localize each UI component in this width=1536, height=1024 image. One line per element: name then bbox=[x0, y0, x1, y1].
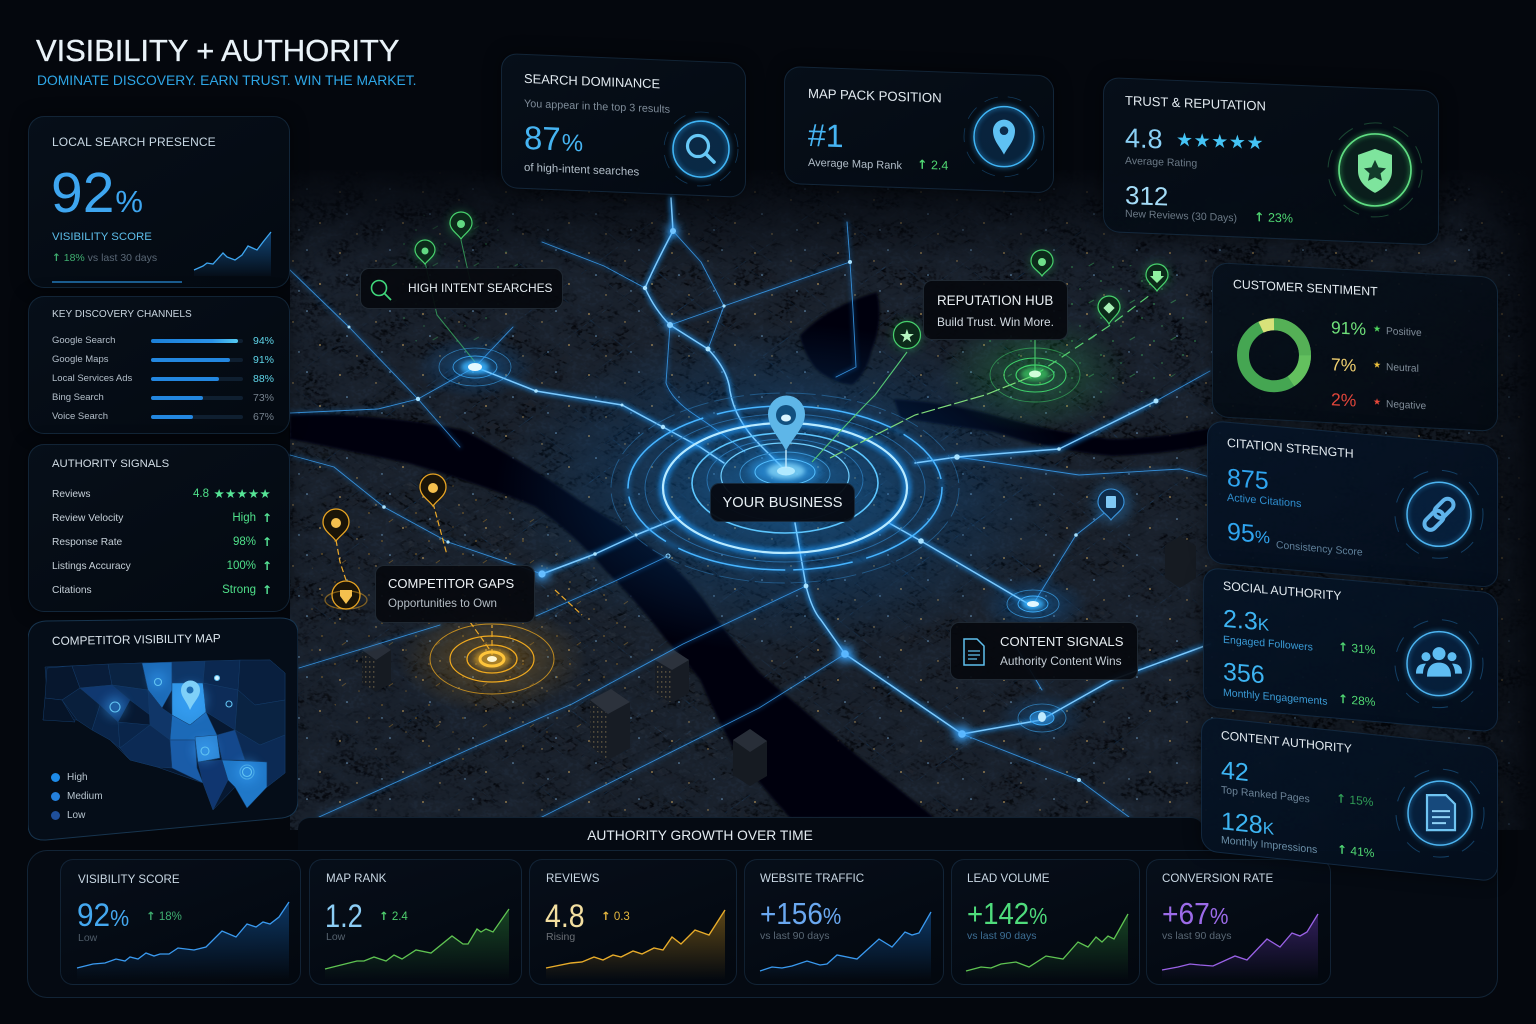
trend: ↑ 2.4 bbox=[379, 909, 408, 923]
metric label: Average Map Rank bbox=[808, 157, 902, 172]
row: response rate bbox=[52, 535, 272, 549]
metric: #1 bbox=[808, 117, 844, 154]
road network bbox=[290, 198, 1210, 820]
metric: followers: 2.3K bbox=[1223, 605, 1269, 636]
heading: KEY DISCOVERY CHANNELS bbox=[52, 309, 192, 320]
sub label: vs last 90 days bbox=[760, 930, 829, 942]
heading: SEARCH DOMINANCE bbox=[524, 71, 660, 91]
label: REVIEWS bbox=[546, 872, 599, 885]
heading: TRUST & REPUTATION bbox=[1125, 93, 1266, 114]
sparkline bbox=[324, 908, 510, 970]
metric: +142% bbox=[967, 896, 1047, 931]
metric: pages: 42 bbox=[1221, 756, 1249, 787]
metric: +156% bbox=[760, 896, 841, 931]
card: visibility score bbox=[60, 859, 301, 985]
row: reviews: Reviews bbox=[52, 489, 90, 500]
metric: +67% bbox=[1162, 896, 1228, 931]
trend: ↑ 18% vs last 30 days bbox=[52, 252, 157, 264]
row: review velocity: Review Velocity bbox=[52, 513, 123, 524]
row: google search: Google Search bbox=[52, 335, 115, 346]
row: response rate: Response Rate bbox=[52, 537, 122, 548]
row: listings accuracy: Listings Accuracy bbox=[52, 561, 131, 572]
metric: citations: 875 bbox=[1227, 464, 1269, 495]
panel: local search presence bbox=[28, 116, 290, 288]
sub label: Low bbox=[78, 932, 97, 944]
panel: customer sentiment: Positive bbox=[1386, 326, 1422, 339]
label: HIGH INTENT SEARCHES bbox=[408, 281, 552, 295]
row: reviews bbox=[52, 486, 271, 501]
panel: citation strength: Active Citations bbox=[1227, 492, 1301, 510]
row: listings accuracy: 100% bbox=[227, 560, 256, 572]
sub label: Rising bbox=[546, 931, 575, 943]
metric: impressions: 128K bbox=[1221, 807, 1274, 839]
heading: SOCIAL AUTHORITY bbox=[1223, 579, 1341, 603]
panel: content authority: ↑ 41% bbox=[1337, 842, 1374, 860]
positive: 91% bbox=[1331, 317, 1366, 339]
heading: LOCAL SEARCH PRESENCE bbox=[52, 135, 216, 149]
panel: customer sentiment: ★ bbox=[1373, 324, 1381, 335]
description: You appear in the top 3 results bbox=[524, 98, 670, 116]
row: voice search bbox=[52, 411, 274, 423]
heading: REPUTATION HUB bbox=[937, 293, 1053, 308]
callout: reputation hub bbox=[923, 280, 1068, 340]
title: VISIBILITY + AUTHORITY bbox=[36, 33, 399, 68]
panel: citation strength bbox=[1207, 420, 1498, 588]
row: local services ads: Local Services Ads bbox=[52, 373, 132, 384]
green target bbox=[990, 348, 1080, 402]
row: citations: Citations bbox=[52, 585, 92, 596]
row: bing search: 73% bbox=[253, 392, 274, 404]
metric: 4.8 bbox=[545, 898, 585, 934]
towers bbox=[362, 536, 1196, 786]
metric: engagements: 356 bbox=[1223, 658, 1265, 689]
row: voice search: 67% bbox=[253, 411, 274, 423]
heading: COMPETITOR VISIBILITY MAP bbox=[52, 631, 221, 648]
heading: AUTHORITY GROWTH OVER TIME bbox=[587, 828, 813, 843]
sub label: Low bbox=[326, 931, 345, 943]
panel: social authority: Monthly Engagements bbox=[1223, 687, 1327, 708]
sparkline bbox=[966, 914, 1128, 972]
rating label: Average Rating bbox=[1125, 155, 1197, 170]
city map background bbox=[288, 172, 1520, 830]
big metric: 92% bbox=[51, 161, 143, 225]
icon: shield bbox=[1328, 122, 1422, 218]
stars: ★★★★★ bbox=[1176, 129, 1264, 154]
legend: medium: Medium bbox=[67, 791, 103, 802]
panel: customer sentiment: ★ bbox=[1373, 397, 1381, 408]
metric: 92% bbox=[77, 897, 129, 933]
metric: 1.2 bbox=[325, 898, 363, 934]
panel: social authority: Engaged Followers bbox=[1223, 634, 1313, 654]
row: citations: ↑ bbox=[262, 583, 272, 597]
panel: authority signals bbox=[28, 444, 290, 612]
blue targets bbox=[439, 348, 1066, 732]
row: google maps: Google Maps bbox=[52, 354, 109, 365]
legend: low bbox=[51, 810, 86, 821]
callout: your business: YOUR BUSINESS bbox=[722, 495, 843, 511]
panel: content authority: ↑ 15% bbox=[1336, 791, 1373, 809]
top band bbox=[298, 817, 1203, 858]
card: reviews bbox=[529, 859, 737, 985]
sparkline bbox=[76, 902, 290, 972]
row: citations: Strong bbox=[222, 584, 256, 596]
heading: COMPETITOR GAPS bbox=[388, 576, 514, 591]
reputation lines bbox=[336, 240, 1150, 655]
row: review velocity: High bbox=[232, 512, 256, 524]
panel: content authority: Top Ranked Pages bbox=[1221, 784, 1310, 805]
sparkline bbox=[760, 912, 932, 973]
panel: content authority: Monthly Impressions bbox=[1221, 834, 1317, 856]
reviews: 312 bbox=[1125, 180, 1168, 212]
trend: ↑ 18% bbox=[146, 909, 182, 923]
panel: social authority: ↑ 28% bbox=[1338, 692, 1375, 709]
sub label: Authority Content Wins bbox=[1000, 654, 1122, 668]
rivers bbox=[290, 292, 1210, 818]
rating: 4.8 bbox=[1125, 123, 1163, 154]
metric: 87% bbox=[524, 119, 583, 157]
panel: customer sentiment: Negative bbox=[1386, 399, 1426, 412]
row: voice search: Voice Search bbox=[52, 411, 108, 422]
legend: medium bbox=[51, 791, 103, 802]
panel: authority growth over time bbox=[27, 817, 1498, 998]
trend: ↑ 0.3 bbox=[601, 909, 630, 923]
heading: CONTENT AUTHORITY bbox=[1221, 728, 1352, 756]
donut chart bbox=[1237, 318, 1311, 392]
legend: high bbox=[51, 772, 88, 783]
outer frame bbox=[27, 850, 1498, 998]
sparkline bbox=[52, 232, 272, 283]
label: WEBSITE TRAFFIC bbox=[760, 872, 864, 885]
heading: CITATION STRENGTH bbox=[1227, 436, 1354, 461]
panel: social authority: ↑ 31% bbox=[1338, 640, 1375, 657]
metric: consistency: 95% bbox=[1227, 518, 1270, 548]
icon: map pin bbox=[964, 96, 1044, 178]
icon: document bbox=[1390, 763, 1490, 863]
neutral: 7% bbox=[1331, 354, 1356, 376]
card: map rank bbox=[309, 859, 522, 985]
row: local services ads bbox=[52, 373, 274, 385]
map glow bbox=[104, 671, 259, 784]
pins: star glyph: ★ bbox=[899, 326, 915, 347]
icon: search bbox=[664, 112, 738, 186]
amber target bbox=[430, 624, 554, 694]
panel: citation strength: Consistency Score bbox=[1276, 540, 1363, 559]
reviews label: New Reviews (30 Days) bbox=[1125, 208, 1237, 224]
label: CONVERSION RATE bbox=[1162, 872, 1273, 885]
panel: content authority bbox=[1201, 716, 1498, 882]
row: google maps: 91% bbox=[253, 354, 274, 366]
metric label: VISIBILITY SCORE bbox=[52, 231, 152, 243]
sparkline bbox=[546, 910, 726, 974]
central glow bbox=[495, 323, 1075, 653]
sparkline bbox=[1162, 914, 1318, 972]
panel: map pack position bbox=[784, 66, 1054, 193]
heading: MAP PACK POSITION bbox=[808, 86, 942, 106]
row: listings accuracy: ↑ bbox=[262, 559, 272, 573]
sub label: Opportunities to Own bbox=[388, 597, 497, 610]
panel: social authority bbox=[1203, 567, 1498, 733]
row: google search: 94% bbox=[253, 335, 274, 347]
icon: document bbox=[961, 637, 987, 667]
trend: ↑ 23% bbox=[1254, 209, 1293, 226]
card: lead volume bbox=[951, 859, 1140, 985]
row: review velocity: ↑ bbox=[262, 511, 272, 525]
sub label: vs last 90 days bbox=[967, 930, 1036, 942]
hero target rings bbox=[611, 393, 959, 583]
icon: search bbox=[368, 277, 394, 303]
panel: customer sentiment bbox=[1212, 262, 1498, 432]
callout: competitor gaps bbox=[375, 565, 535, 623]
negative: 2% bbox=[1331, 389, 1356, 411]
pin: document marker bbox=[1092, 483, 1132, 523]
row: response rate: ↑ bbox=[262, 535, 272, 549]
icon: people bbox=[1389, 614, 1489, 714]
heading: AUTHORITY SIGNALS bbox=[52, 458, 169, 470]
panel: customer sentiment: ★ bbox=[1373, 360, 1381, 371]
row: reviews: ★★★★★ bbox=[213, 486, 271, 501]
row: citations bbox=[52, 583, 272, 597]
panel: competitor visibility map bbox=[28, 618, 298, 840]
panel: customer sentiment: Neutral bbox=[1386, 362, 1419, 375]
trend: ↑ 2.4 bbox=[917, 157, 948, 173]
row: google search bbox=[52, 335, 274, 347]
legend: low: Low bbox=[67, 810, 85, 821]
heading: CONTENT SIGNALS bbox=[1000, 634, 1123, 649]
row: local services ads: 88% bbox=[253, 373, 274, 385]
pins: amber bbox=[323, 474, 446, 609]
callout: high intent searches bbox=[360, 268, 563, 309]
panel: key discovery channels bbox=[28, 296, 290, 434]
row: response rate: 98% bbox=[233, 536, 256, 548]
icon: link bbox=[1394, 470, 1484, 559]
map markers bbox=[110, 676, 254, 779]
choropleth map bbox=[43, 660, 285, 810]
card: website traffic bbox=[744, 859, 944, 985]
row: google maps bbox=[52, 354, 274, 366]
panel: trust and reputation bbox=[1103, 77, 1439, 245]
row: bing search: Bing Search bbox=[52, 392, 104, 403]
heading: CUSTOMER SENTIMENT bbox=[1233, 277, 1378, 299]
panel: search dominance bbox=[501, 53, 746, 198]
pin: your business bbox=[768, 396, 805, 468]
legend: high: High bbox=[67, 772, 88, 783]
metric label: of high-intent searches bbox=[524, 162, 639, 179]
card: conversion rate bbox=[1146, 859, 1331, 985]
label: LEAD VOLUME bbox=[967, 872, 1049, 885]
sub label: vs last 90 days bbox=[1162, 930, 1231, 942]
row: review velocity bbox=[52, 511, 272, 525]
row: reviews: 4.8 bbox=[193, 488, 209, 500]
label: MAP RANK bbox=[326, 872, 386, 885]
city blocks bbox=[292, 197, 1460, 817]
row: bing search bbox=[52, 392, 274, 404]
subtitle: DOMINATE DISCOVERY. EARN TRUST. WIN THE MARKET. bbox=[37, 72, 416, 88]
pins: green bbox=[415, 212, 1168, 349]
sub label: Build Trust. Win More. bbox=[937, 315, 1054, 329]
row: listings accuracy bbox=[52, 559, 272, 573]
label: VISIBILITY SCORE bbox=[78, 873, 180, 886]
callout: your business bbox=[710, 483, 855, 522]
callout: content signals bbox=[950, 622, 1138, 680]
